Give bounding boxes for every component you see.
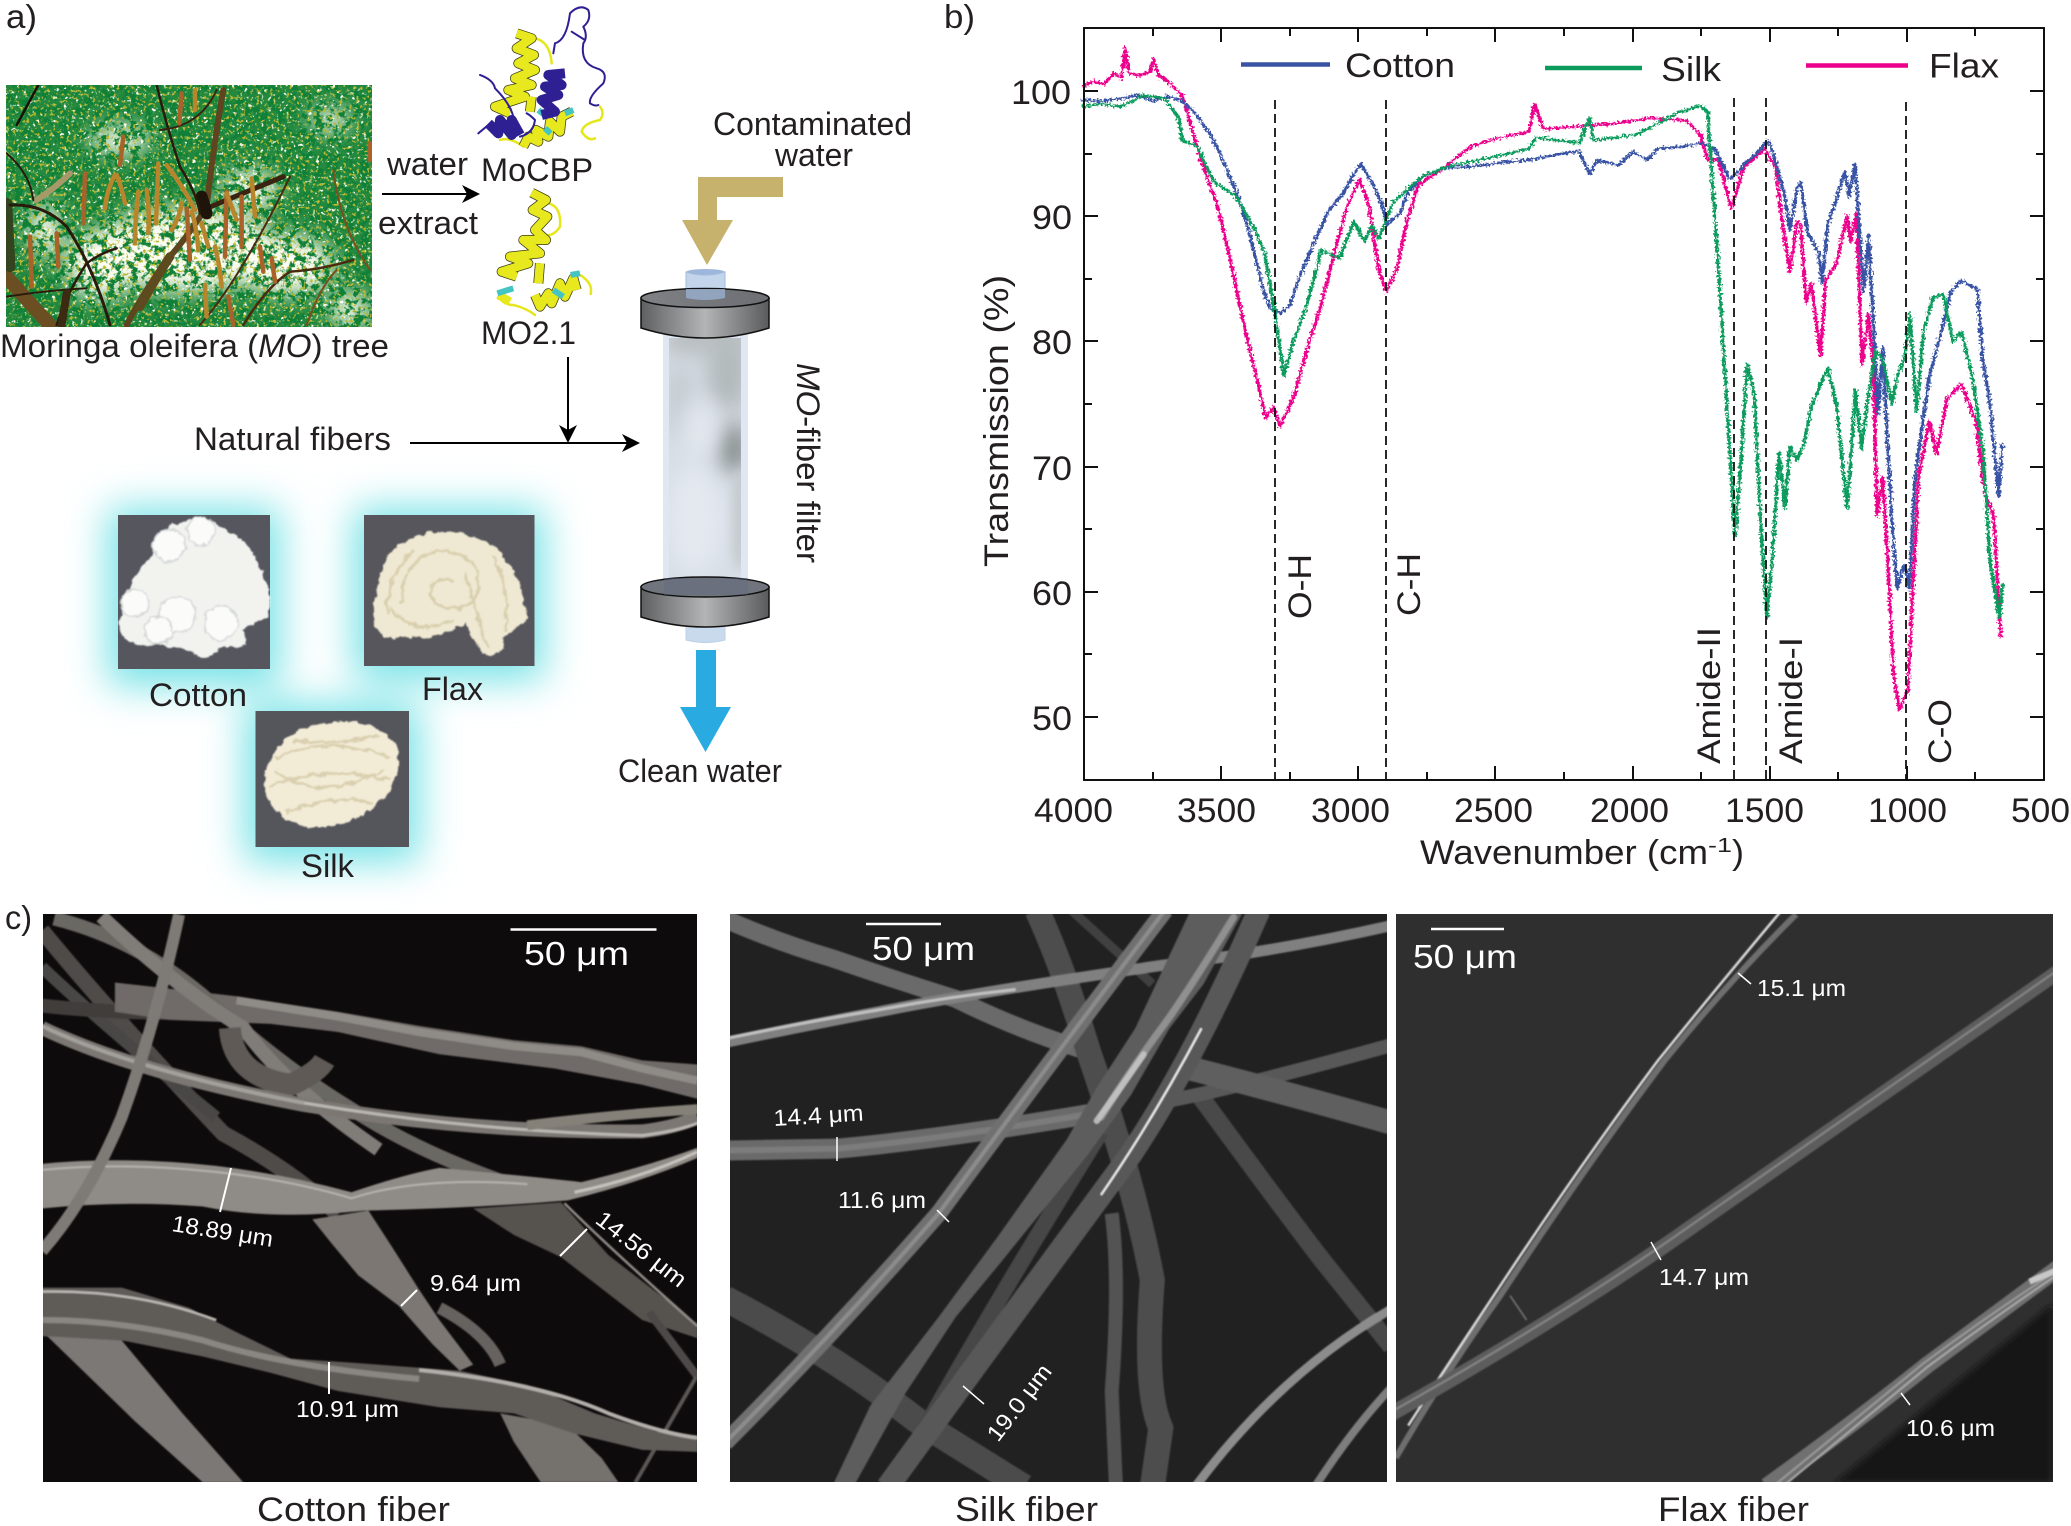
y-axis tick labels: 90 xyxy=(1032,199,1072,237)
y-axis tick labels: 100 xyxy=(1011,74,1071,112)
tube outer xyxy=(663,330,748,600)
label: Clean water: Clean water xyxy=(618,753,782,789)
label: MO2.1: MO2.1 xyxy=(481,315,576,351)
x-axis tick labels xyxy=(1034,792,2070,830)
measurement labels: 11.6 μm xyxy=(838,1187,926,1213)
band labels xyxy=(1282,553,1958,764)
flax strands xyxy=(1388,910,2059,1486)
label: Contaminated water xyxy=(713,106,912,173)
measurement labels xyxy=(170,1205,692,1422)
arrow: protein down to fibers xyxy=(559,357,577,443)
label: Contaminated water: Contaminated xyxy=(713,106,912,142)
band labels: O-H xyxy=(1282,554,1318,619)
measurement labels: 14.56 μm xyxy=(591,1205,692,1292)
arrow: contaminated water inlet xyxy=(682,177,783,265)
y-axis tick labels xyxy=(1011,74,1072,738)
measurement labels: 10.91 μm xyxy=(296,1396,399,1422)
y-axis title: Transmission (%) xyxy=(978,275,1016,567)
main twisted ribbon xyxy=(42,1148,698,1215)
micrograph: silk fiber xyxy=(725,910,1392,1487)
dark corner xyxy=(1836,1304,2053,1482)
label: MO-fiber filter: MO -fiber filter xyxy=(790,363,826,563)
legend: Cotton xyxy=(1345,47,1455,85)
sample: silk xyxy=(256,711,409,847)
plot frame and ticks xyxy=(1084,28,2044,780)
legend: Silk xyxy=(1661,51,1722,89)
curve: Cotton xyxy=(1082,95,2002,589)
protein structure: MO2.1 xyxy=(497,193,591,315)
measurement labels: 14.7 μm xyxy=(1659,1264,1749,1290)
measurement labels xyxy=(773,1100,1057,1446)
arrow: clean water outlet xyxy=(680,650,731,752)
x-axis tick labels: 4000 xyxy=(1034,792,1113,830)
y-axis tick labels: 60 xyxy=(1032,575,1072,613)
fiber core xyxy=(669,338,741,578)
label: MoCBP: MoCBP xyxy=(481,152,593,188)
crossing thin strand xyxy=(42,914,179,1251)
scale bar: 50 μm xyxy=(1413,938,1517,975)
label: Natural fibers: Natural fibers xyxy=(194,421,391,457)
curve: Flax xyxy=(1082,48,2001,710)
x-axis tick labels: 3000 xyxy=(1311,792,1390,830)
label: water: water xyxy=(386,146,468,182)
y-axis tick labels: 70 xyxy=(1032,450,1072,488)
y-axis tick labels: 50 xyxy=(1032,700,1072,738)
scale bar: 50 μm xyxy=(872,930,975,967)
x-axis tick labels: 2500 xyxy=(1454,792,1533,830)
measurements xyxy=(220,1168,587,1394)
glow behind fiber samples xyxy=(108,508,544,862)
band labels: C-O xyxy=(1922,699,1958,764)
curve: Silk xyxy=(1082,95,2003,617)
bottom cap xyxy=(641,577,769,627)
bottom strands xyxy=(500,1413,619,1482)
x-axis tick labels: 2000 xyxy=(1590,792,1669,830)
legend: Flax xyxy=(1929,48,1999,86)
x-axis tick labels: 1000 xyxy=(1868,792,1947,830)
measurement labels: 10.6 μm xyxy=(1906,1415,1995,1441)
lower crossing strand xyxy=(312,1211,473,1371)
background cotton strands xyxy=(42,931,338,1215)
photo: Moringa oleifera tree xyxy=(6,85,372,328)
chart: FTIR spectra xyxy=(978,28,2070,872)
bottom nozzle xyxy=(686,625,725,642)
top cap xyxy=(641,288,769,338)
arrow: natural fibers to filter xyxy=(410,434,640,452)
label: Flax: Flax xyxy=(422,671,483,707)
label: extract: extract xyxy=(378,205,478,241)
dashed reference lines xyxy=(1275,98,1906,780)
tree caption: Moringa oleifera ( MO) tree xyxy=(0,328,389,364)
measurement labels: 19.0 μm xyxy=(981,1359,1057,1446)
silk strands xyxy=(725,910,1392,1487)
measurement labels: 18.89 μm xyxy=(170,1210,275,1252)
x-axis title: Wavenumber (cm xyxy=(1420,834,1708,872)
x-axis tick labels: 500 xyxy=(2011,792,2070,830)
filter column xyxy=(641,269,769,642)
inlet nozzle xyxy=(686,269,725,301)
measurements xyxy=(1651,973,1910,1405)
sample: flax xyxy=(364,515,534,666)
measurement labels: 15.1 μm xyxy=(1757,975,1846,1001)
arrow: water extract to proteins xyxy=(382,185,480,203)
protein structure: MoCBP xyxy=(478,7,605,147)
x-axis title: -1 xyxy=(1708,835,1732,857)
micrograph: flax fiber xyxy=(1388,910,2059,1486)
x-axis title: ) xyxy=(1732,834,1744,872)
measurement labels: 9.64 μm xyxy=(430,1270,521,1296)
x-axis tick labels: 1500 xyxy=(1725,792,1804,830)
panel label c: c) xyxy=(5,899,32,936)
micrograph: cotton fiber xyxy=(42,914,698,1482)
measurement labels: 14.4 μm xyxy=(773,1100,864,1131)
measurements xyxy=(837,1137,984,1404)
y-axis tick labels: 80 xyxy=(1032,324,1072,362)
label: Contaminated water: water xyxy=(774,137,853,173)
band labels: Amide-II xyxy=(1691,627,1727,764)
scale bar: 50 μm xyxy=(524,935,629,972)
label: Silk: Silk xyxy=(301,848,355,884)
measurement labels xyxy=(1659,975,1995,1441)
x-axis tick labels: 3500 xyxy=(1177,792,1256,830)
band labels: C-H xyxy=(1391,553,1427,616)
label: Cotton: Cotton xyxy=(149,677,247,713)
sample: cotton xyxy=(118,515,270,669)
band labels: Amide-I xyxy=(1773,637,1809,764)
legend xyxy=(1241,47,1999,89)
